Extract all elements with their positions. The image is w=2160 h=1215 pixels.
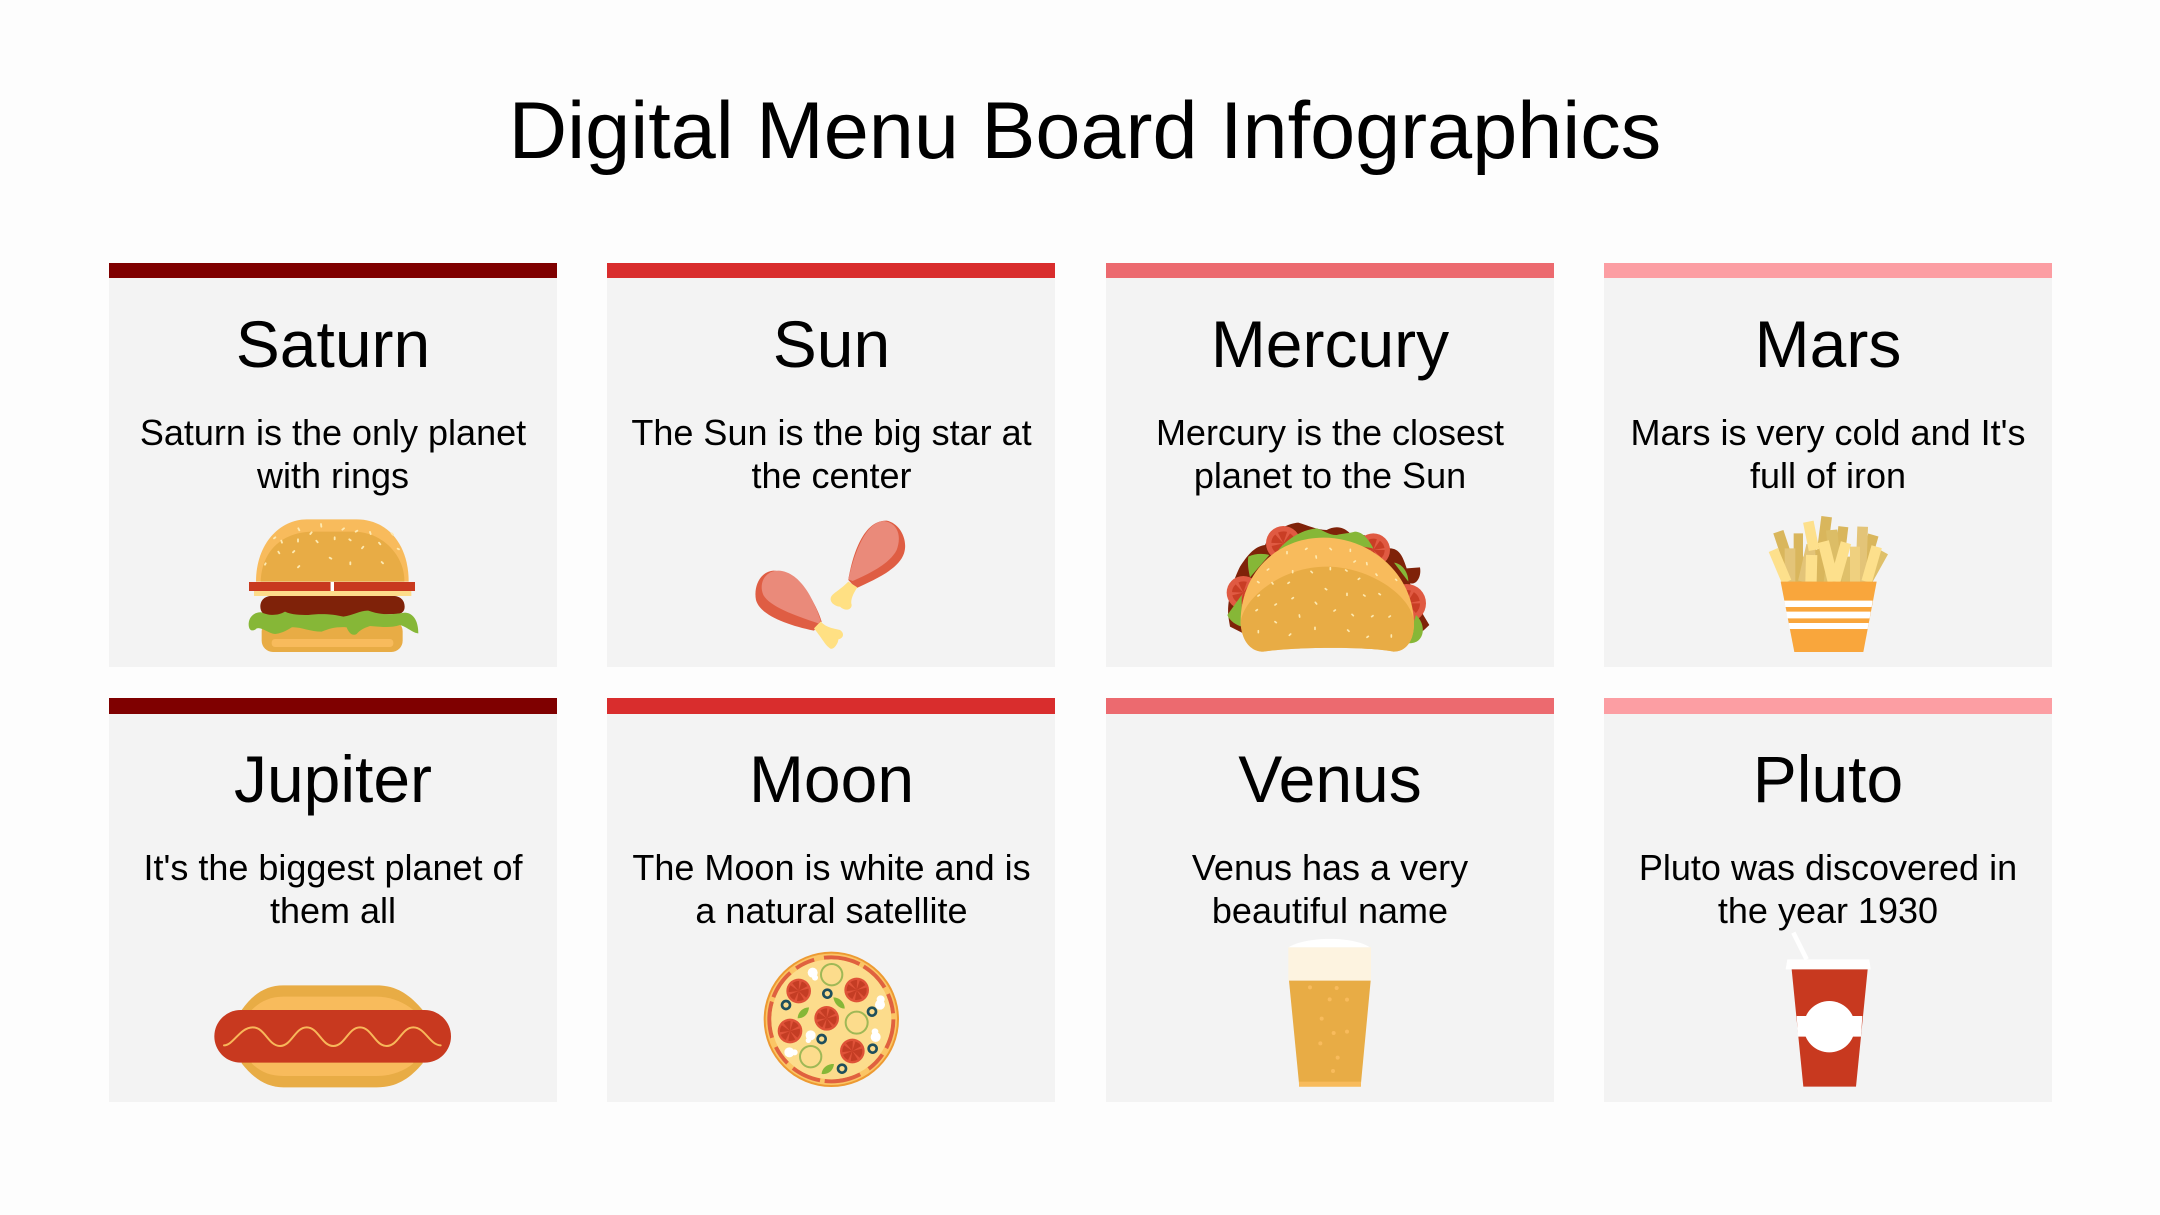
accent bar (1604, 698, 2052, 714)
description: them all (270, 890, 396, 931)
icon: soda cup (1786, 933, 1871, 1087)
description: The Moon is white and is (632, 847, 1031, 888)
description: Saturn is the only planet (140, 412, 526, 453)
panel: Jupiter (109, 698, 557, 1102)
heading: Pluto (1753, 742, 1903, 816)
accent bar (109, 698, 557, 714)
icon: chicken drumsticks (755, 521, 905, 649)
panel: Mars (1604, 263, 2052, 667)
accent bar (607, 698, 1055, 714)
icon: burger (249, 519, 418, 652)
description: Pluto was discovered in (1639, 847, 2017, 888)
panel: Saturn (109, 263, 557, 667)
description: planet to the Sun (1194, 455, 1466, 496)
accent bar (109, 263, 557, 278)
description: The Sun is the big star at (631, 412, 1032, 453)
heading: Mars (1755, 307, 1901, 381)
accent bar (607, 263, 1055, 278)
icon: taco (1227, 523, 1429, 652)
icon: beer glass (1288, 939, 1371, 1087)
panel: Sun (607, 263, 1055, 667)
heading: Mercury (1211, 307, 1449, 381)
description: beautiful name (1212, 890, 1448, 931)
accent bar (1106, 263, 1554, 278)
heading: Venus (1238, 742, 1422, 816)
description: the year 1930 (1718, 890, 1938, 931)
heading: Jupiter (234, 742, 432, 816)
icon: fries (1773, 517, 1883, 652)
description: the center (751, 455, 912, 496)
description: It's the biggest planet of (143, 847, 524, 888)
accent bar (1604, 263, 2052, 278)
panel: Mercury (1106, 263, 1554, 667)
description: Mercury is the closest (1156, 412, 1504, 453)
panel: Moon (607, 698, 1055, 1102)
icon: pizza (764, 952, 899, 1087)
title: Digital Menu Board Infographics (509, 86, 1661, 176)
accent bar (1106, 698, 1554, 714)
icon: hot dog (214, 985, 451, 1087)
panel: Venus (1106, 698, 1554, 1102)
description: Mars is very cold and It's (1630, 412, 2026, 453)
panel: Pluto (1604, 698, 2052, 1102)
description: Venus has a very (1192, 847, 1468, 888)
description: a natural satellite (695, 890, 968, 931)
description: with rings (256, 455, 409, 496)
heading: Sun (773, 307, 890, 381)
description: full of iron (1750, 455, 1906, 496)
heading: Saturn (236, 307, 430, 381)
heading: Moon (749, 742, 914, 816)
